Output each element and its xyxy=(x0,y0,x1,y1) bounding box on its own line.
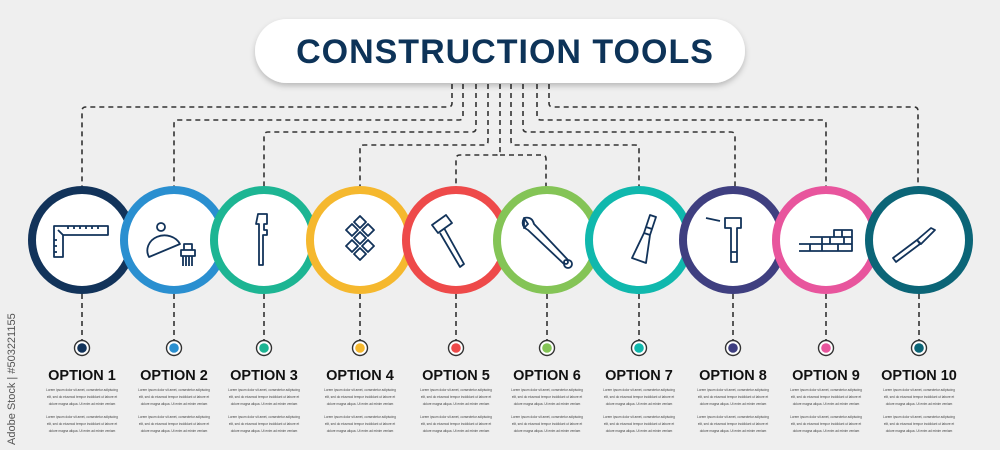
description texts: elit, sed do eiusmod tempor incididunt ut labore et xyxy=(421,395,491,399)
description texts: Lorem ipsum dolor sit amet, consectetur adipiscing xyxy=(511,415,583,419)
description texts: Lorem ipsum dolor sit amet, consectetur adipiscing xyxy=(790,388,862,392)
title: CONSTRUCTION TOOLS xyxy=(296,33,714,71)
description texts: elit, sed do eiusmod tempor incididunt ut labore et xyxy=(229,395,299,399)
option labels: OPTION 7 xyxy=(605,368,673,384)
option labels: OPTION 9 xyxy=(792,368,860,384)
description texts: dolore magna aliqua. Ut enim ad minim veniam xyxy=(700,429,767,433)
icon: sledge hammer xyxy=(432,215,464,267)
description texts: dolore magna aliqua. Ut enim ad minim veniam xyxy=(141,429,208,433)
description texts: Lorem ipsum dolor sit amet, consectetur adipiscing xyxy=(603,388,675,392)
description texts: Lorem ipsum dolor sit amet, consectetur adipiscing xyxy=(697,388,769,392)
description texts: Lorem ipsum dolor sit amet, consectetur adipiscing xyxy=(420,415,492,419)
description texts: Lorem ipsum dolor sit amet, consectetur adipiscing xyxy=(228,415,300,419)
description texts: dolore magna aliqua. Ut enim ad minim veniam xyxy=(49,429,116,433)
dots xyxy=(74,340,926,356)
description texts: dolore magna aliqua. Ut enim ad minim veniam xyxy=(327,429,394,433)
description texts: dolore magna aliqua. Ut enim ad minim veniam xyxy=(793,402,860,406)
description texts: elit, sed do eiusmod tempor incididunt ut labore et xyxy=(512,395,582,399)
description texts: Lorem ipsum dolor sit amet, consectetur adipiscing xyxy=(883,415,955,419)
description texts: dolore magna aliqua. Ut enim ad minim veniam xyxy=(49,402,116,406)
description texts: dolore magna aliqua. Ut enim ad minim veniam xyxy=(606,402,673,406)
description texts: elit, sed do eiusmod tempor incididunt ut labore et xyxy=(139,422,209,426)
description texts: elit, sed do eiusmod tempor incididunt ut labore et xyxy=(139,395,209,399)
description texts: dolore magna aliqua. Ut enim ad minim veniam xyxy=(514,402,581,406)
description texts: elit, sed do eiusmod tempor incididunt ut labore et xyxy=(791,422,861,426)
circles row xyxy=(32,190,969,290)
option labels: OPTION 1 xyxy=(48,368,116,384)
icon: brick wall xyxy=(799,230,852,251)
description texts: elit, sed do eiusmod tempor incididunt ut labore et xyxy=(884,422,954,426)
description texts: elit, sed do eiusmod tempor incididunt ut labore et xyxy=(47,422,117,426)
description texts: elit, sed do eiusmod tempor incididunt ut labore et xyxy=(325,422,395,426)
option labels: OPTION 4 xyxy=(326,368,394,384)
description texts: Lorem ipsum dolor sit amet, consectetur adipiscing xyxy=(790,415,862,419)
description texts: dolore magna aliqua. Ut enim ad minim veniam xyxy=(886,402,953,406)
option labels xyxy=(48,368,957,384)
description texts: elit, sed do eiusmod tempor incididunt ut labore et xyxy=(421,422,491,426)
description texts: elit, sed do eiusmod tempor incididunt ut labore et xyxy=(884,395,954,399)
description texts: elit, sed do eiusmod tempor incididunt ut labore et xyxy=(229,422,299,426)
description texts: Lorem ipsum dolor sit amet, consectetur adipiscing xyxy=(138,388,210,392)
description texts: Lorem ipsum dolor sit amet, consectetur adipiscing xyxy=(697,415,769,419)
description texts: dolore magna aliqua. Ut enim ad minim veniam xyxy=(231,429,298,433)
icon: blow torch xyxy=(706,218,741,262)
description texts: dolore magna aliqua. Ut enim ad minim veniam xyxy=(886,429,953,433)
description texts: elit, sed do eiusmod tempor incididunt ut labore et xyxy=(604,422,674,426)
description texts: Lorem ipsum dolor sit amet, consectetur adipiscing xyxy=(420,388,492,392)
description texts: Lorem ipsum dolor sit amet, consectetur adipiscing xyxy=(324,388,396,392)
icon: chisel xyxy=(893,228,935,262)
title xyxy=(255,19,745,83)
icon: brush and dustpan xyxy=(147,223,195,266)
icons xyxy=(54,214,935,268)
description texts: Lorem ipsum dolor sit amet, consectetur adipiscing xyxy=(603,415,675,419)
description texts: dolore magna aliqua. Ut enim ad minim veniam xyxy=(514,429,581,433)
description texts: Lorem ipsum dolor sit amet, consectetur adipiscing xyxy=(883,388,955,392)
icon: square ruler xyxy=(54,226,108,257)
option labels: OPTION 10 xyxy=(881,368,957,384)
description texts xyxy=(46,388,955,433)
icon: adjustable wrench xyxy=(523,218,572,268)
description texts: elit, sed do eiusmod tempor incididunt ut labore et xyxy=(47,395,117,399)
description texts: elit, sed do eiusmod tempor incididunt ut labore et xyxy=(604,395,674,399)
description texts: dolore magna aliqua. Ut enim ad minim veniam xyxy=(231,402,298,406)
description texts: dolore magna aliqua. Ut enim ad minim veniam xyxy=(423,402,490,406)
description texts: Lorem ipsum dolor sit amet, consectetur adipiscing xyxy=(46,415,118,419)
description texts: dolore magna aliqua. Ut enim ad minim veniam xyxy=(793,429,860,433)
description texts: Lorem ipsum dolor sit amet, consectetur adipiscing xyxy=(324,415,396,419)
description texts: dolore magna aliqua. Ut enim ad minim veniam xyxy=(327,402,394,406)
option labels: OPTION 8 xyxy=(699,368,767,384)
description texts: dolore magna aliqua. Ut enim ad minim veniam xyxy=(423,429,490,433)
description texts: Lorem ipsum dolor sit amet, consectetur adipiscing xyxy=(511,388,583,392)
description texts: Lorem ipsum dolor sit amet, consectetur adipiscing xyxy=(46,388,118,392)
option labels: OPTION 5 xyxy=(422,368,490,384)
description texts: elit, sed do eiusmod tempor incididunt ut labore et xyxy=(698,395,768,399)
description texts: dolore magna aliqua. Ut enim ad minim veniam xyxy=(606,429,673,433)
connector lines xyxy=(82,84,919,340)
description texts: elit, sed do eiusmod tempor incididunt ut labore et xyxy=(698,422,768,426)
option labels: OPTION 3 xyxy=(230,368,298,384)
description texts: Lorem ipsum dolor sit amet, consectetur adipiscing xyxy=(228,388,300,392)
option labels: OPTION 6 xyxy=(513,368,581,384)
option labels: OPTION 2 xyxy=(140,368,208,384)
description texts: dolore magna aliqua. Ut enim ad minim veniam xyxy=(700,402,767,406)
watermark side text: Adobe Stock | #503221155 xyxy=(6,313,18,445)
description texts: Lorem ipsum dolor sit amet, consectetur adipiscing xyxy=(138,415,210,419)
description texts: elit, sed do eiusmod tempor incididunt ut labore et xyxy=(791,395,861,399)
icon: putty knife xyxy=(632,215,656,263)
icon: tiles xyxy=(346,216,374,260)
icon: pipe wrench xyxy=(256,214,267,265)
description texts: elit, sed do eiusmod tempor incididunt ut labore et xyxy=(512,422,582,426)
description texts: elit, sed do eiusmod tempor incididunt ut labore et xyxy=(325,395,395,399)
description texts: dolore magna aliqua. Ut enim ad minim veniam xyxy=(141,402,208,406)
